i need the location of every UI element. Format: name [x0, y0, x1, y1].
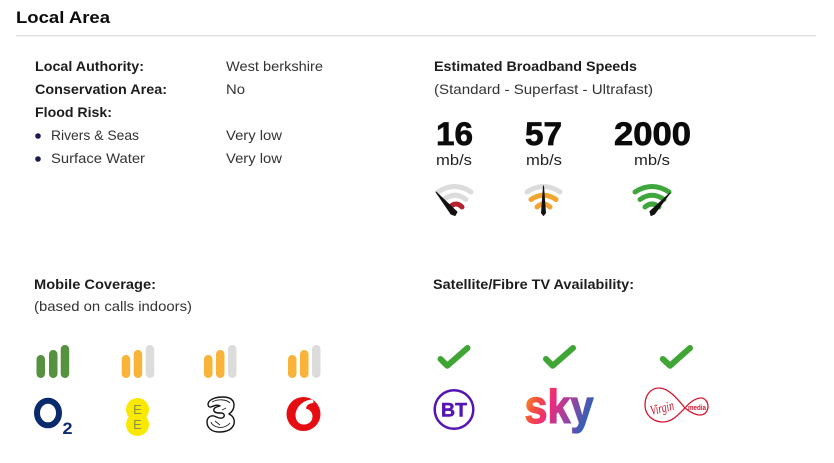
logo: Vodafone [286, 397, 320, 431]
rivers and seas row [35, 127, 283, 143]
logo: Virgin Media [645, 388, 708, 422]
panel: broadband speeds [434, 58, 691, 216]
local authority row [35, 58, 323, 74]
icon: amber speed gauge [527, 186, 560, 216]
signal bars: EE [122, 345, 154, 378]
signal bars: Vodafone [288, 345, 320, 378]
logo: Three [207, 397, 234, 432]
icon: check mark Sky [546, 348, 573, 366]
surface water row [35, 150, 283, 166]
icon: green speed gauge [635, 186, 670, 216]
superfast speed: 57 [525, 116, 562, 152]
mobile heading: Mobile Coverage: [34, 276, 156, 292]
panel: TV availability [433, 276, 708, 433]
panel: mobile coverage [34, 276, 320, 438]
panel: property details [35, 58, 323, 166]
rivers and seas row: Very low [226, 127, 283, 143]
superfast speed [525, 116, 562, 169]
icon: check mark Virgin Media [663, 348, 690, 366]
logo: Virgin Media: media [688, 405, 706, 412]
rivers and seas row: Rivers & Seas [51, 127, 139, 143]
local authority row: Local Authority: [35, 58, 144, 74]
signal bars: Three [204, 345, 236, 378]
logo: BT [435, 390, 473, 429]
logo: O2 [37, 401, 72, 438]
title: Local Area [16, 8, 111, 27]
standard speed [436, 116, 473, 169]
logo: EE [126, 398, 149, 436]
mobile subheading: (based on calls indoors) [34, 298, 192, 314]
icon: check mark BT [440, 348, 468, 366]
standard speed: 16 [436, 116, 473, 152]
logo: BT: BT [441, 400, 467, 422]
local authority row: West berkshire [226, 58, 323, 74]
surface water row: Surface Water [51, 150, 145, 166]
broadband subheading: (Standard - Superfast - Ultrafast) [434, 81, 653, 97]
broadband heading: Estimated Broadband Speeds [434, 58, 637, 74]
icon: red speed gauge [436, 186, 471, 216]
flood risk heading: Flood Risk: [35, 104, 112, 120]
conservation area row [35, 81, 245, 97]
logo: EE: E [133, 417, 142, 432]
ultrafast speed: mb/s [634, 152, 670, 169]
conservation area row: Conservation Area: [35, 81, 167, 97]
surface water row: Very low [226, 150, 283, 166]
logo: Virgin Media: Virgin [649, 399, 676, 419]
logo: Sky: sky [524, 380, 594, 433]
ultrafast speed: 2000 [614, 116, 691, 152]
conservation area row: No [226, 81, 245, 97]
signal bars: O2 [36, 345, 69, 378]
superfast speed: mb/s [526, 152, 562, 169]
standard speed: mb/s [436, 152, 472, 169]
logo: O2: 2 [62, 420, 72, 438]
ultrafast speed [614, 116, 691, 169]
TV heading: Satellite/Fibre TV Availability: [433, 276, 634, 292]
logo: EE: E [133, 402, 142, 417]
